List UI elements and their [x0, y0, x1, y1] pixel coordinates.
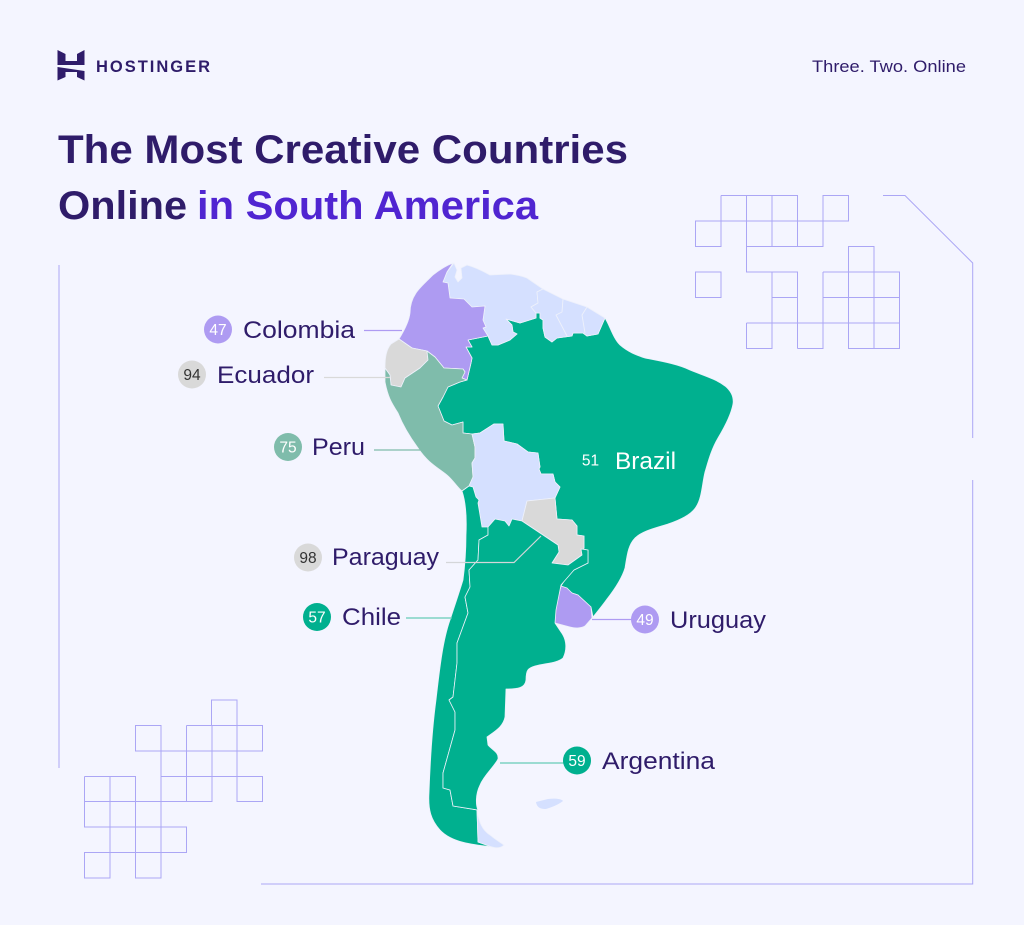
label: Ecuador: 94: [183, 367, 201, 384]
frame lines: [59, 196, 973, 884]
countries: Guyana, Suriname, French Guiana: [531, 289, 605, 342]
country: Peru: [385, 351, 475, 491]
label: Chile: 57: [308, 610, 326, 626]
label: Paraguay: [294, 544, 439, 572]
tagline: Three. Two. Online: [812, 57, 966, 76]
label: Ecuador: [178, 360, 314, 389]
label: Argentina: Argentina: [602, 748, 716, 775]
title: in South America: [197, 184, 539, 228]
country: Colombia: [399, 263, 488, 380]
label: Paraguay: 98: [299, 550, 317, 567]
label: Brazil: [582, 448, 676, 475]
label: Uruguay: [631, 606, 766, 634]
country: Chile: [429, 486, 493, 847]
grid pattern top right: [696, 196, 900, 348]
country: Argentina: [443, 519, 588, 810]
map of South America: [385, 263, 733, 848]
label: Peru: [274, 433, 365, 461]
wordmark: HOSTINGER: [96, 58, 210, 76]
label: Colombia: Colombia: [243, 317, 356, 344]
label: Peru: 75: [279, 440, 297, 456]
Falkland Islands: [536, 799, 563, 809]
label: Brazil: 51: [582, 452, 599, 470]
label: Colombia: 47: [209, 322, 227, 339]
grid pattern bottom left: [84, 700, 262, 878]
country: Uruguay: [555, 586, 592, 628]
country: Ecuador: [385, 339, 428, 387]
country: Bolivia: [469, 424, 560, 527]
label: Brazil: Brazil: [615, 448, 676, 475]
label: Uruguay: 49: [636, 612, 654, 629]
label: Argentina: [563, 746, 716, 775]
logo: [58, 50, 210, 80]
label: Ecuador: Ecuador: [217, 362, 314, 389]
label: Paraguay: Paraguay: [332, 544, 439, 571]
country: Brazil: [438, 313, 733, 617]
country: Venezuela: [443, 263, 543, 345]
icon: Hostinger H: [58, 50, 84, 80]
label: Peru: Peru: [312, 434, 365, 461]
Tierra del Fuego: [477, 810, 504, 848]
label: Colombia: [204, 316, 356, 344]
label: Chile: Chile: [342, 604, 401, 631]
title: [58, 128, 628, 228]
country: Paraguay: [522, 498, 584, 565]
label: Uruguay: Uruguay: [670, 607, 766, 634]
title: The Most Creative Countries: [58, 128, 628, 172]
leader lines: [324, 330, 632, 763]
label: Chile: [303, 603, 401, 631]
label: Argentina: 59: [568, 753, 586, 770]
title: Online: [58, 184, 187, 228]
